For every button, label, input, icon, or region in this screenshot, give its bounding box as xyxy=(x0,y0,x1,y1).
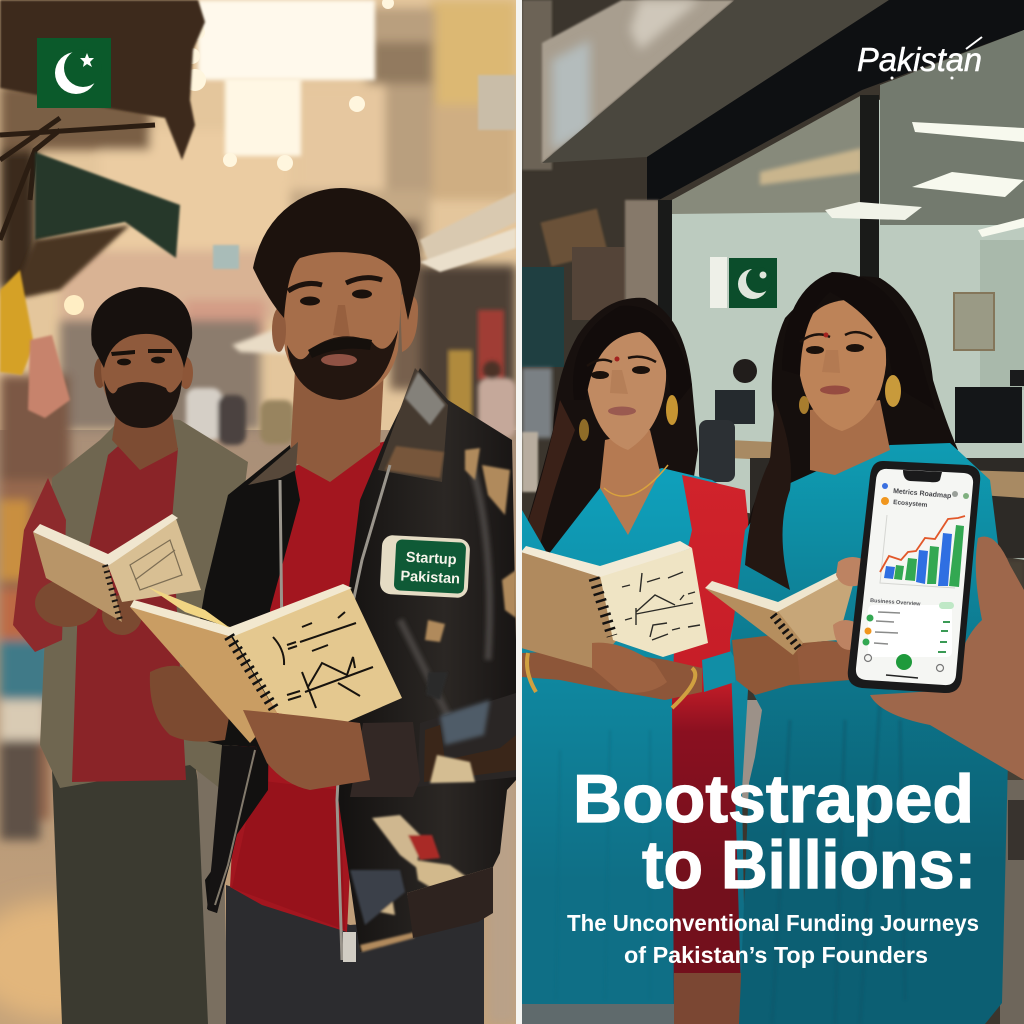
building exterior xyxy=(522,0,552,170)
growth line xyxy=(880,516,965,572)
hair xyxy=(91,287,192,368)
transaction list xyxy=(862,598,954,657)
hand left xyxy=(150,666,232,742)
worn leather patches xyxy=(425,448,516,700)
face xyxy=(101,334,182,398)
bottom navigation xyxy=(864,654,944,678)
main notebook xyxy=(130,584,402,743)
face xyxy=(284,252,402,393)
notch xyxy=(903,470,942,482)
ears xyxy=(182,357,193,389)
earrings xyxy=(885,375,901,407)
transaction list: Business Overview xyxy=(870,598,921,608)
teal kurta xyxy=(522,468,748,1024)
hair back xyxy=(525,298,698,556)
logo: Pakistan wordmark: Pakistan xyxy=(857,41,982,78)
floor beyond figures xyxy=(1000,560,1024,800)
finger over book xyxy=(797,641,860,680)
beard xyxy=(287,330,398,400)
red tee xyxy=(230,440,390,932)
jeans xyxy=(226,885,484,1024)
eyes and brows xyxy=(288,278,382,306)
kurta hem xyxy=(522,1004,674,1024)
phone showing growth chart xyxy=(848,461,980,693)
jacket sleeve xyxy=(447,693,516,780)
arm and hands xyxy=(732,633,850,695)
subtitle xyxy=(567,910,979,968)
neck and chest xyxy=(600,430,660,535)
red tee xyxy=(72,440,186,782)
ceiling lights xyxy=(912,122,1024,142)
face xyxy=(797,300,886,431)
dupatta hem xyxy=(674,973,742,1024)
hair falling over shoulder xyxy=(745,400,791,590)
neck xyxy=(810,400,890,475)
panel: bazaar founders (left photo) xyxy=(0,0,516,1024)
hair top xyxy=(782,272,935,410)
jacket hem ribbing xyxy=(407,867,493,938)
person: woman with red dupatta xyxy=(521,298,750,1024)
jacket collar xyxy=(248,442,298,485)
street background xyxy=(0,0,516,1024)
framed picture xyxy=(954,293,994,350)
trousers xyxy=(52,765,208,1024)
panel: office founders (right photo) xyxy=(521,0,1024,1024)
title: to Billions: xyxy=(642,827,976,903)
app header xyxy=(881,483,969,509)
jacket front wear xyxy=(350,815,468,952)
hair back xyxy=(746,276,958,590)
small notebook xyxy=(705,572,853,655)
patch: Startup Pakistan xyxy=(379,535,470,598)
cuff xyxy=(350,722,420,797)
face xyxy=(585,324,666,450)
nose shadow xyxy=(333,305,350,338)
hands xyxy=(35,579,99,627)
beard xyxy=(104,380,182,428)
teal sari xyxy=(730,443,1008,1024)
subtitle: The Unconventional Funding Journeys xyxy=(567,910,979,936)
patch: Startup Pakistan: Pakistan xyxy=(400,568,460,588)
hair xyxy=(253,188,420,320)
ears xyxy=(400,294,418,352)
person: background founder xyxy=(13,287,248,1024)
market awnings xyxy=(0,0,516,420)
leather jacket right side xyxy=(337,368,516,952)
neck xyxy=(290,373,384,482)
bar chart xyxy=(880,515,965,588)
hand xyxy=(592,643,667,693)
earrings xyxy=(666,395,678,425)
office interior xyxy=(672,30,1024,560)
divider between photos xyxy=(516,0,522,1024)
zipper xyxy=(280,465,390,960)
necklace xyxy=(604,465,668,496)
person: woman in teal sari xyxy=(705,272,1008,1024)
wall flag xyxy=(710,257,777,308)
notebook with equations xyxy=(521,541,708,668)
app header: Metrics Roadmap xyxy=(893,488,952,500)
neck xyxy=(112,413,178,470)
person: main founder in leather jacket xyxy=(130,188,516,1024)
patch: Startup Pakistan: Startup xyxy=(405,550,457,568)
red dupatta xyxy=(672,475,750,1024)
title xyxy=(573,761,976,903)
face details xyxy=(800,332,872,394)
small notebook xyxy=(33,514,201,622)
desk and monitors xyxy=(955,387,1022,443)
icon: Pakistan flag xyxy=(37,38,111,108)
hand holding phone xyxy=(833,537,1024,780)
crowd in the distance xyxy=(186,361,516,445)
open olive shirt xyxy=(40,415,248,790)
eyes xyxy=(111,349,172,365)
arms xyxy=(522,650,702,700)
subtitle: of Pakistan’s Top Founders xyxy=(624,942,928,968)
hair top xyxy=(573,306,692,410)
left sleeve xyxy=(13,478,66,652)
hand right xyxy=(243,710,370,790)
leather jacket left side xyxy=(200,445,300,913)
app header: Ecosystem xyxy=(893,499,928,509)
title: Bootstraped xyxy=(573,761,974,837)
office background xyxy=(522,0,1024,1024)
face details xyxy=(587,356,656,416)
